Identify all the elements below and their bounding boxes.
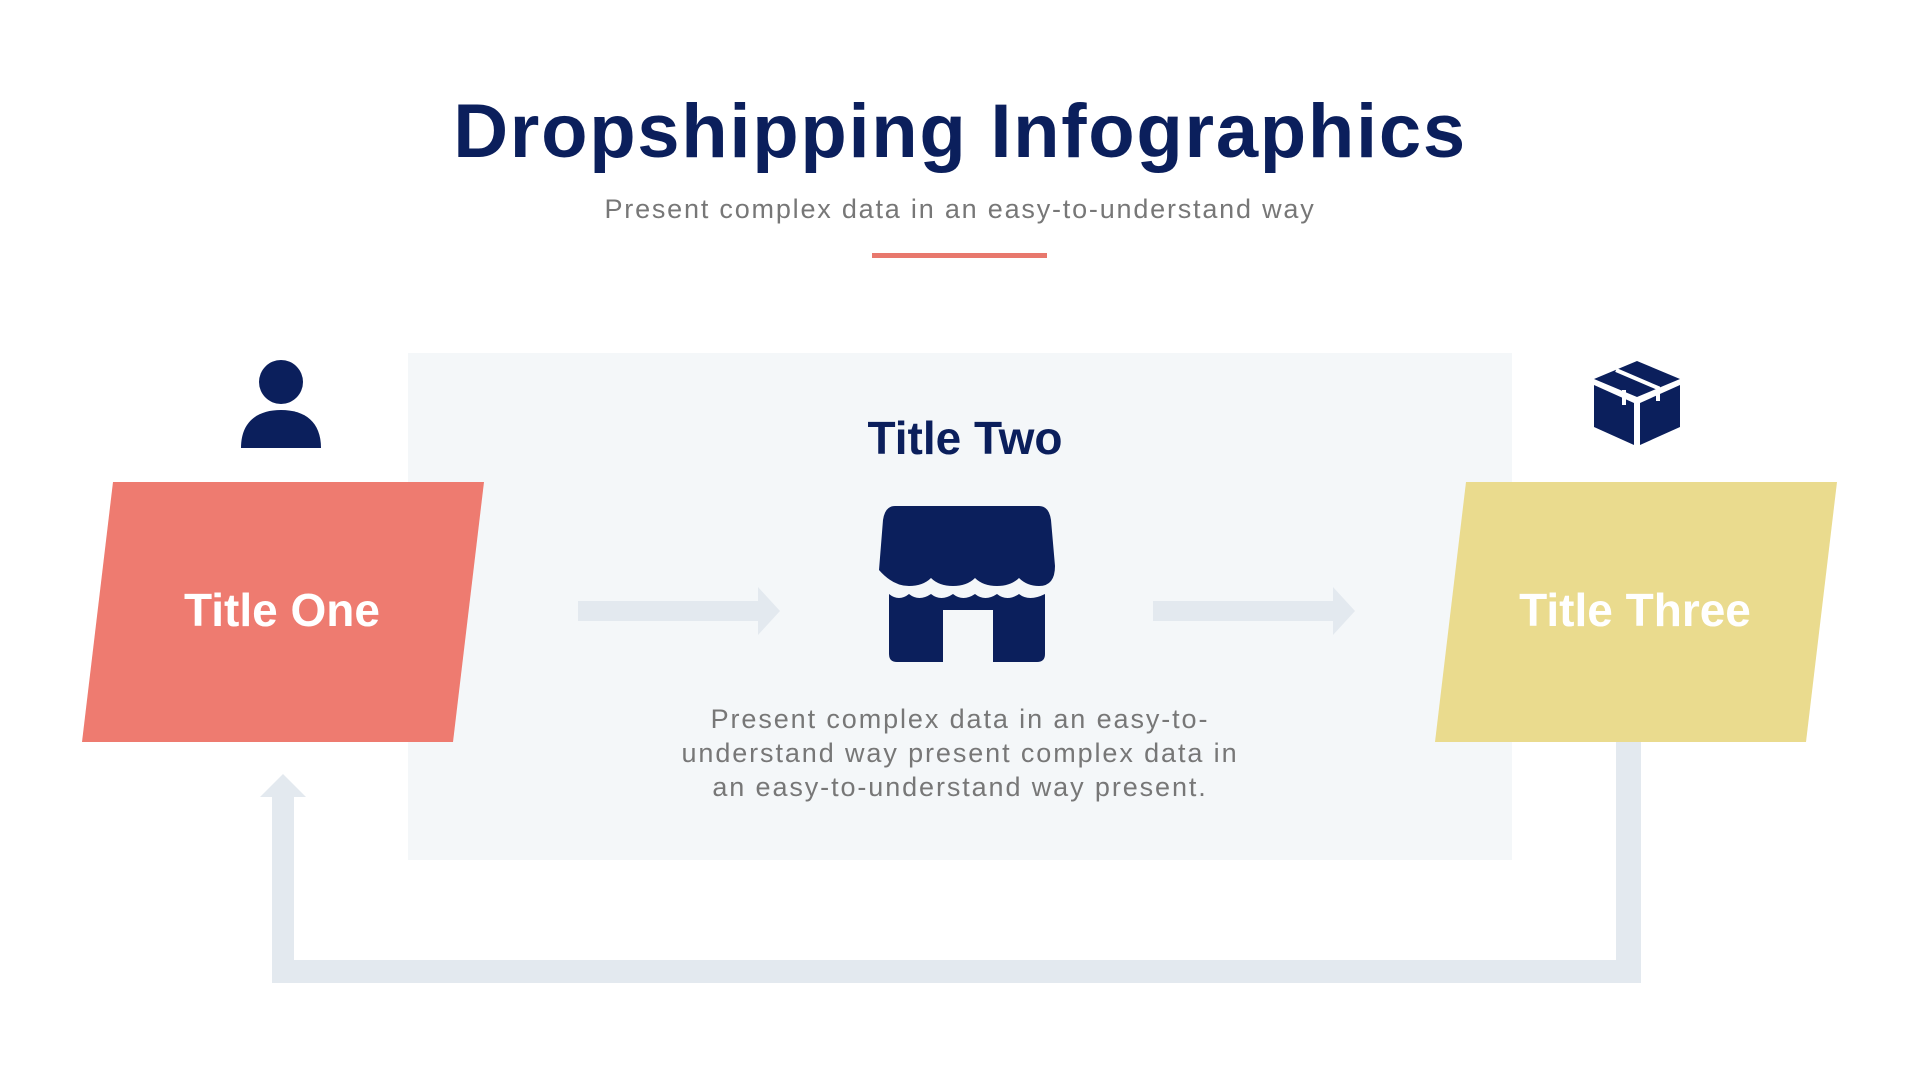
title three text: Title Three (1519, 584, 1751, 636)
body text: understand way present complex data in (682, 738, 1238, 768)
panel: center background (408, 353, 1512, 860)
arrow: two to three (1153, 588, 1355, 634)
title: Dropshipping Infographics (453, 89, 1467, 174)
icon: box (1594, 361, 1680, 445)
body text: Present complex data in an easy-to- (711, 704, 1209, 734)
panel: title one (82, 482, 484, 742)
icon: person (241, 360, 321, 448)
arrow: one to two (578, 588, 780, 634)
panel: title three (1435, 482, 1837, 742)
title one text: Title One (184, 584, 380, 636)
accent line (872, 253, 1047, 258)
subtitle: Present complex data in an easy-to-understand way (604, 194, 1316, 224)
icon: store (879, 506, 1055, 662)
body text (682, 704, 1238, 802)
title two heading: Title Two (867, 412, 1063, 464)
body text: an easy-to-understand way present. (712, 772, 1208, 802)
